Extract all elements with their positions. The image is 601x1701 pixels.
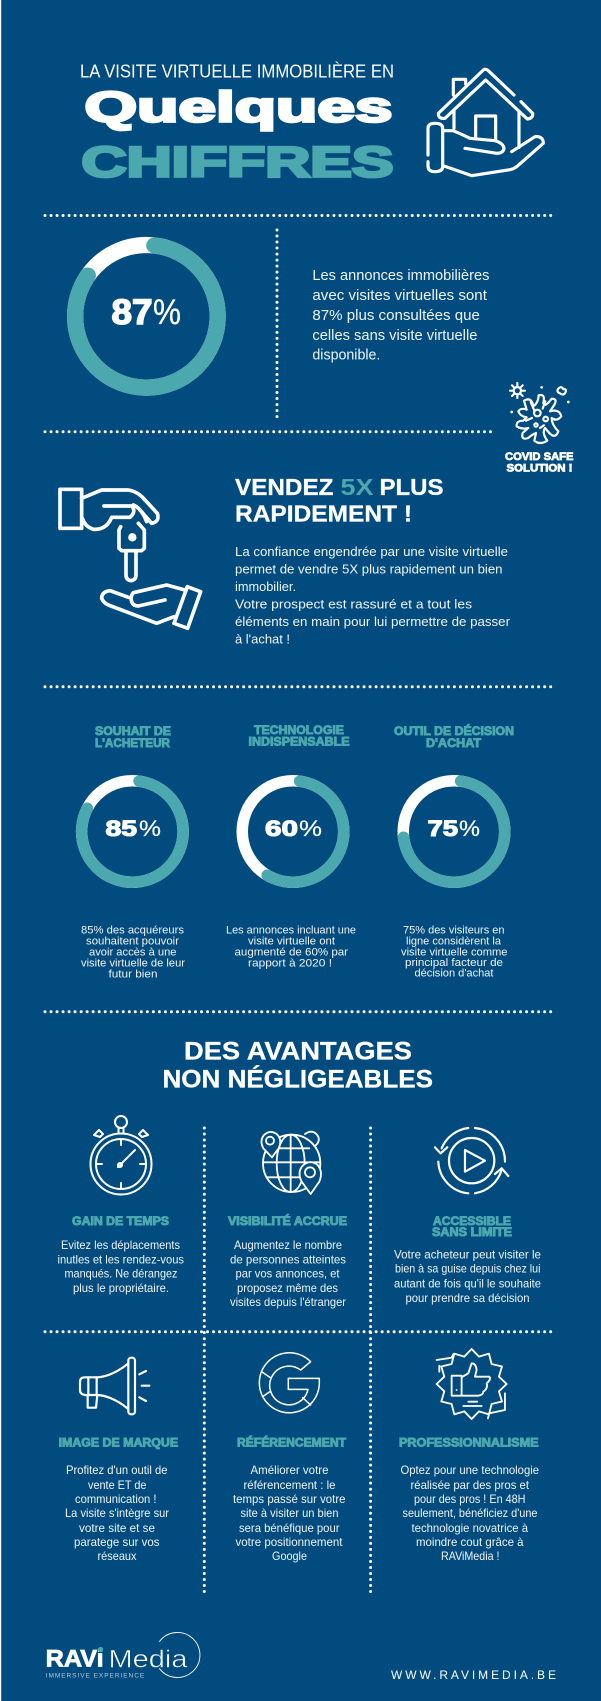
statistic description (312, 268, 489, 364)
icon: hands passing a key (60, 489, 201, 628)
heading: des avantages non négligeables: NON NÉGLIGEABLES (162, 1064, 433, 1093)
description: visite virtuelle de leur (81, 957, 185, 969)
panel: gain de temps: GAIN DE TEMPS (72, 1216, 169, 1228)
statistic description: 87% plus consultées que (312, 308, 480, 324)
donut chart: 87% (68, 237, 225, 395)
description: futur bien (108, 968, 158, 980)
description: RAViMedia ! (441, 1549, 500, 1563)
title kicker: LA VISITE VIRTUELLE IMMOBILIÈRE EN (80, 60, 394, 81)
description (394, 1248, 541, 1305)
icon: google G (259, 1353, 319, 1413)
paragraph: trust: éléments en main pour lui permettre de passer (235, 614, 511, 629)
title: Chiffres: CHIFFRES (82, 139, 394, 187)
logo: RAViMedia: IMMERSIVE EXPERIENCE (46, 1672, 145, 1679)
heading: INDISPENSABLE (248, 737, 350, 749)
description: pour des pros ! En 48H (414, 1492, 526, 1506)
panel: image de marque (59, 1358, 178, 1563)
description (400, 1463, 539, 1563)
description: principal facteur de (405, 957, 503, 969)
statistic description: avec visites virtuelles sont (312, 288, 487, 304)
donut chart: 75%: 75 (428, 816, 458, 841)
description: avoir accès à une (89, 946, 176, 958)
badge: covid safe solution: COVID SAFE (505, 451, 574, 463)
icon: virus (510, 383, 568, 443)
description: sera bénéfique pour (239, 1521, 340, 1535)
panel: buyer wish 85% (75, 726, 189, 980)
heading: vendez 5x plus rapidement: PLUS (380, 474, 444, 500)
description (233, 1463, 346, 1563)
heading: vendez 5x plus rapidement: VENDEZ (235, 474, 334, 500)
paragraph: trust: à l'achat ! (235, 631, 290, 646)
description: votre site et se (79, 1521, 155, 1535)
heading: OUTIL DE DÉCISION (394, 725, 514, 738)
donut chart: 60% (236, 775, 350, 888)
heading: des avantages non négligeables: DES AVANTAGES (184, 1037, 412, 1065)
heading: L'ACHETEUR (95, 738, 171, 750)
donut chart: 85%: 85 (106, 816, 137, 841)
donut chart: 85%: % (139, 816, 161, 841)
website address: WWW.RAVIMEDIA.BE (391, 1668, 556, 1682)
description: augmenté de 60% par (234, 946, 348, 958)
description: plus le propriétaire. (73, 1281, 169, 1295)
heading: TECHNOLOGIE (254, 725, 344, 737)
description: 75% des visiteurs en (403, 924, 504, 936)
description: Les annonces incluant une (226, 924, 356, 936)
description: 85% des acquéreurs (81, 924, 185, 936)
description: réalisée par des pros et (410, 1478, 530, 1492)
description: communication ! (75, 1492, 156, 1506)
donut chart: 60%: 60 (265, 816, 298, 841)
panel: purchase decision tool 75% (394, 725, 514, 979)
description: seulement, bénéficiez d'une (402, 1506, 538, 1520)
heading (394, 725, 514, 750)
statistic description: celles sans visite virtuelle (312, 328, 477, 344)
heading (248, 725, 350, 749)
description: bien à sa guise depuis chez lui (395, 1262, 540, 1276)
description (65, 1463, 169, 1563)
description: paratege sur vos (74, 1535, 160, 1549)
heading: SANS LIMITE (432, 1227, 512, 1239)
description: Optez pour une technologie (400, 1463, 539, 1477)
heading: SOUHAIT DE (95, 726, 171, 738)
icon: megaphone (80, 1358, 149, 1414)
description: Evitez les déplacements (61, 1238, 180, 1252)
paragraph: trust (235, 544, 511, 646)
statistic description: Les annonces immobilières (312, 268, 489, 284)
donut chart: 87%: % (153, 293, 181, 332)
description: visite virtuelle comme (401, 946, 508, 958)
description: La visite s'intègre sur (65, 1506, 169, 1520)
panel: visibilité accrue (228, 1132, 347, 1309)
donut chart: 75% (397, 775, 511, 888)
description: Votre acheteur peut visiter le (394, 1248, 541, 1262)
icon: stopwatch (90, 1116, 152, 1194)
icon: thumbs up badge (437, 1349, 507, 1419)
header panel (80, 60, 543, 187)
panel: image de marque: IMAGE DE MARQUE (59, 1438, 178, 1450)
description: ligne considèrent la (406, 935, 501, 947)
badge: covid safe solution (505, 383, 574, 474)
paragraph: trust: La confiance engendrée par une visite virtuelle (235, 544, 508, 559)
description (81, 924, 185, 980)
donut chart: 75%: % (459, 816, 480, 841)
logo: RAViMedia: RAVi (46, 1646, 104, 1673)
panel: gain de temps (58, 1116, 184, 1295)
description: visite virtuelle ont (248, 935, 335, 947)
statistic description: disponible. (312, 348, 380, 364)
description: Google (272, 1549, 307, 1563)
description: réseaux (98, 1549, 136, 1563)
description (226, 924, 356, 969)
heading (432, 1216, 512, 1239)
description: Augmentez le nombre (234, 1238, 342, 1252)
description: Améliorer votre (250, 1463, 329, 1477)
description: moindre cout grâce à (416, 1535, 524, 1549)
heading: D'ACHAT (426, 738, 481, 750)
panel: référencement (233, 1353, 346, 1563)
description: votre positionnement (236, 1535, 343, 1549)
description: visites depuis l'étranger (230, 1295, 346, 1309)
logo: RAViMedia (46, 1632, 200, 1679)
description: temps passé sur votre (233, 1492, 346, 1506)
paragraph: trust: permet de vendre 5X plus rapidement un bien (235, 562, 502, 576)
badge: covid safe solution: SOLUTION ! (506, 462, 572, 474)
panel: professionnalisme: PROFESSIONNALISME (399, 1438, 539, 1450)
panel: professionnalisme (399, 1349, 539, 1563)
description: décision d'achat (414, 967, 494, 979)
donut chart: 87%: 87 (112, 293, 152, 332)
panel: visibilité accrue: VISIBILITÉ ACCRUE (228, 1215, 347, 1228)
panel: sell five times faster (60, 474, 511, 646)
panel: accessible sans limite (394, 1128, 541, 1305)
icon: play button with rotating arrows (435, 1128, 508, 1193)
description: inutles et les rendez-vous (58, 1252, 184, 1266)
heading: des avantages non négligeables (162, 1037, 433, 1093)
donut chart: 60%: % (299, 816, 322, 841)
paragraph: trust: immobilier. (235, 579, 296, 594)
description: proposez même des (237, 1281, 338, 1295)
donut chart: 85% (75, 775, 189, 888)
title: Quelques: Quelques (84, 84, 392, 132)
description (230, 1238, 346, 1309)
panel: indispensable technology 60% (226, 725, 356, 969)
heading: vendez 5x plus rapidement: 5X (340, 474, 374, 500)
panel: 87 percent statistic (68, 230, 489, 418)
description: vente ET de (88, 1478, 147, 1492)
logo: RAViMedia: Media (108, 1646, 188, 1674)
description: site à visiter un bien (240, 1506, 338, 1520)
heading: vendez 5x plus rapidement: RAPIDEMENT ! (235, 501, 412, 527)
description (401, 924, 508, 979)
description: manqués. Ne dérangez (64, 1266, 178, 1280)
heading (95, 726, 171, 750)
icon: globe with location pins (261, 1132, 321, 1194)
heading: vendez 5x plus rapidement (235, 474, 444, 527)
description: rapport à 2020 ! (248, 957, 332, 969)
icon: house in hand (428, 69, 543, 176)
description (58, 1238, 184, 1295)
description: Profitez d'un outil de (66, 1463, 168, 1477)
description: technologie novatrice à (412, 1521, 528, 1535)
description: par vos annonces, et (236, 1266, 340, 1280)
description: autant de fois qu'il le souhaite (394, 1277, 541, 1291)
paragraph: trust: Votre prospect est rassuré et a tout les (235, 596, 472, 611)
description: référencement : le (244, 1478, 336, 1492)
description: pour prendre sa décision (406, 1291, 530, 1305)
panel: référencement: RÉFÉRENCEMENT (237, 1437, 346, 1450)
description: de personnes atteintes (230, 1252, 346, 1266)
description: souhaitent pouvoir (86, 935, 179, 947)
heading: ACCESSIBLE (433, 1216, 511, 1228)
